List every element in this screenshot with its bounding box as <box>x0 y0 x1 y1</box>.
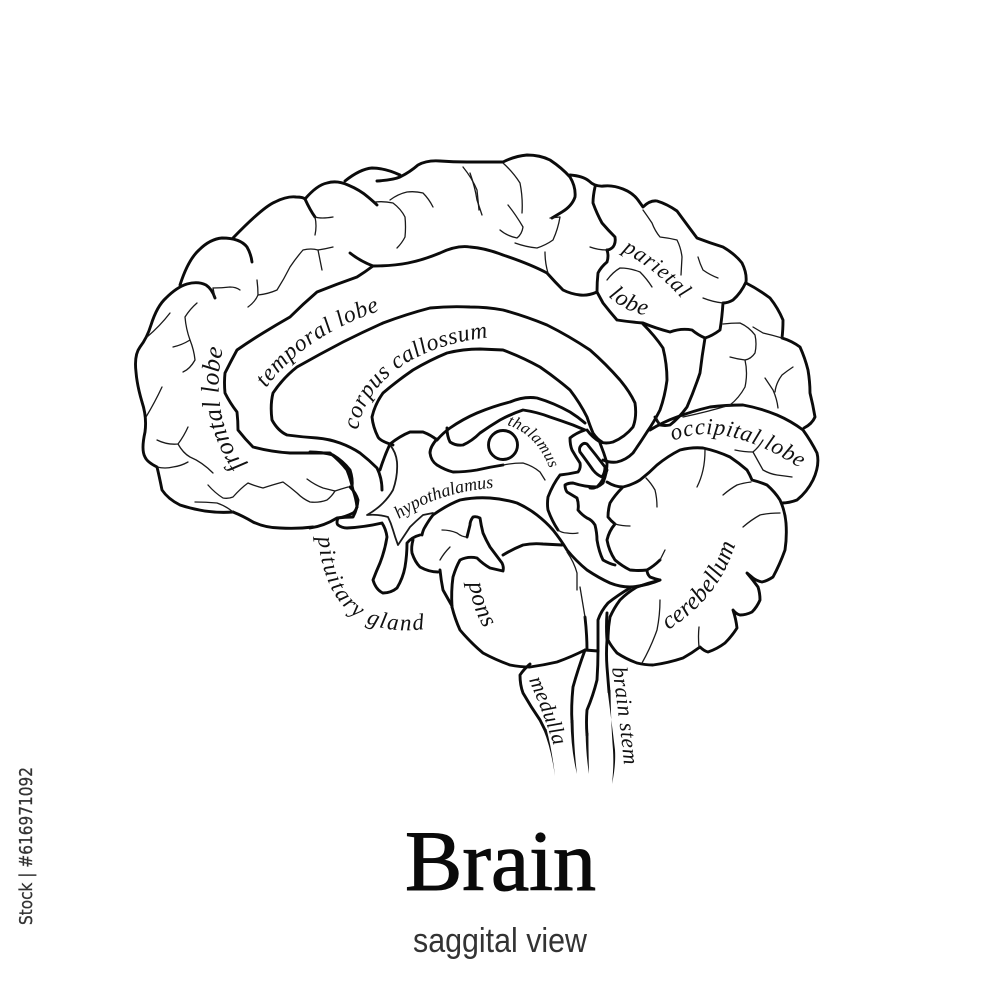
tapered stem ends <box>544 690 615 784</box>
thin sulci lines <box>146 163 793 663</box>
cerebellum <box>607 448 786 665</box>
label: occipital lobe: occipital lobe <box>672 419 804 466</box>
stem thin connectors <box>567 552 585 617</box>
pons and medulla <box>452 517 630 735</box>
label: brain stem: brain stem <box>612 668 634 764</box>
title: Brain <box>405 813 596 909</box>
thalamus circle <box>488 430 518 460</box>
hypothalamus and pituitary gland <box>233 452 660 606</box>
label: frontal lobe: frontal lobe <box>200 347 248 472</box>
label: pons: pons <box>464 582 494 626</box>
side stock id: Stock | #616971092 <box>16 767 37 925</box>
label: cerebellum: cerebellum <box>665 542 736 628</box>
brain illustration <box>136 155 818 784</box>
label: corpus callossum: corpus callossum <box>348 326 487 429</box>
cerebrum outer contour and lobes <box>136 155 818 512</box>
label: medulla: medulla <box>529 677 564 745</box>
label: parietal: parietal <box>618 242 692 298</box>
label: hypothalamus: hypothalamus <box>394 480 492 519</box>
corpus callosum and inner structures <box>271 307 636 565</box>
label: thalamus: thalamus <box>508 416 556 468</box>
label: lobe (parietal): lobe <box>609 286 648 314</box>
label: pituitary gland: pituitary gland <box>313 536 423 630</box>
subtitle: saggital view <box>413 922 587 960</box>
label: temporal lobe: temporal lobe <box>258 301 378 386</box>
